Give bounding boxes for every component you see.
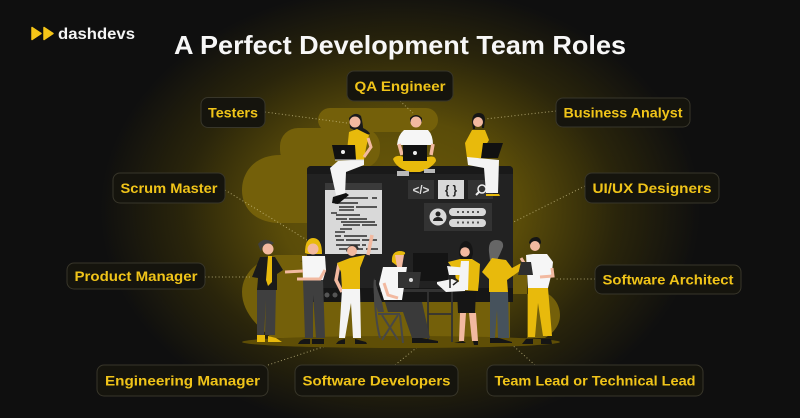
search button	[468, 180, 493, 199]
person: technical lead gray-haired man	[482, 240, 524, 343]
person: QA engineer cross-legged	[393, 115, 436, 176]
person: scrum master	[285, 238, 326, 344]
label: Software Developers: Software Developers	[302, 372, 451, 388]
connector lines	[205, 101, 595, 365]
label: Product Manager	[67, 263, 205, 289]
label: UI/UX Designers: UI/UX Designers	[592, 180, 712, 196]
label: Scrum Master	[113, 173, 225, 203]
label: Testers	[201, 98, 265, 128]
braces button: { }	[445, 185, 458, 197]
title: A Perfect Development Team Roles	[174, 30, 626, 60]
person: tester seated left	[330, 114, 371, 204]
braces button	[438, 180, 464, 199]
label: UI/UX Designers	[585, 173, 719, 203]
label: Team Lead or Technical Lead	[487, 365, 703, 396]
code tag button	[408, 180, 434, 199]
login panel	[424, 203, 492, 231]
desk and chair	[374, 253, 453, 343]
label: Business Analyst	[556, 98, 690, 127]
monitor	[307, 166, 513, 302]
ground shadow	[242, 336, 560, 348]
label: QA Engineer	[347, 71, 453, 101]
logo: dashdevs: dashdevs	[58, 26, 135, 43]
label: Testers: Testers	[208, 104, 258, 120]
label: Team Lead or Technical Lead: Team Lead or Technical Lead	[494, 372, 696, 388]
label: Engineering Manager: Engineering Manager	[105, 372, 261, 388]
person: product manager	[252, 240, 283, 342]
person: team lead woman with papers	[437, 241, 480, 345]
person: business analyst seated right	[465, 113, 503, 196]
label: Software Architect	[595, 265, 741, 294]
label: Scrum Master: Scrum Master	[120, 180, 218, 196]
label: Product Manager: Product Manager	[74, 268, 198, 284]
label: Software Developers	[295, 365, 458, 396]
person: software architect	[518, 237, 553, 344]
label: Software Architect: Software Architect	[602, 272, 734, 288]
label: QA Engineer: QA Engineer	[354, 78, 446, 94]
background blobs	[242, 108, 560, 338]
label: Business Analyst: Business Analyst	[564, 104, 683, 120]
code tag button: </>	[413, 185, 430, 197]
person: software developer at laptop	[379, 251, 438, 343]
person: engineering manager pointing at screen	[336, 235, 372, 344]
code document	[325, 183, 382, 254]
label: Engineering Manager	[97, 365, 268, 396]
logo: dashdevs	[32, 26, 135, 43]
